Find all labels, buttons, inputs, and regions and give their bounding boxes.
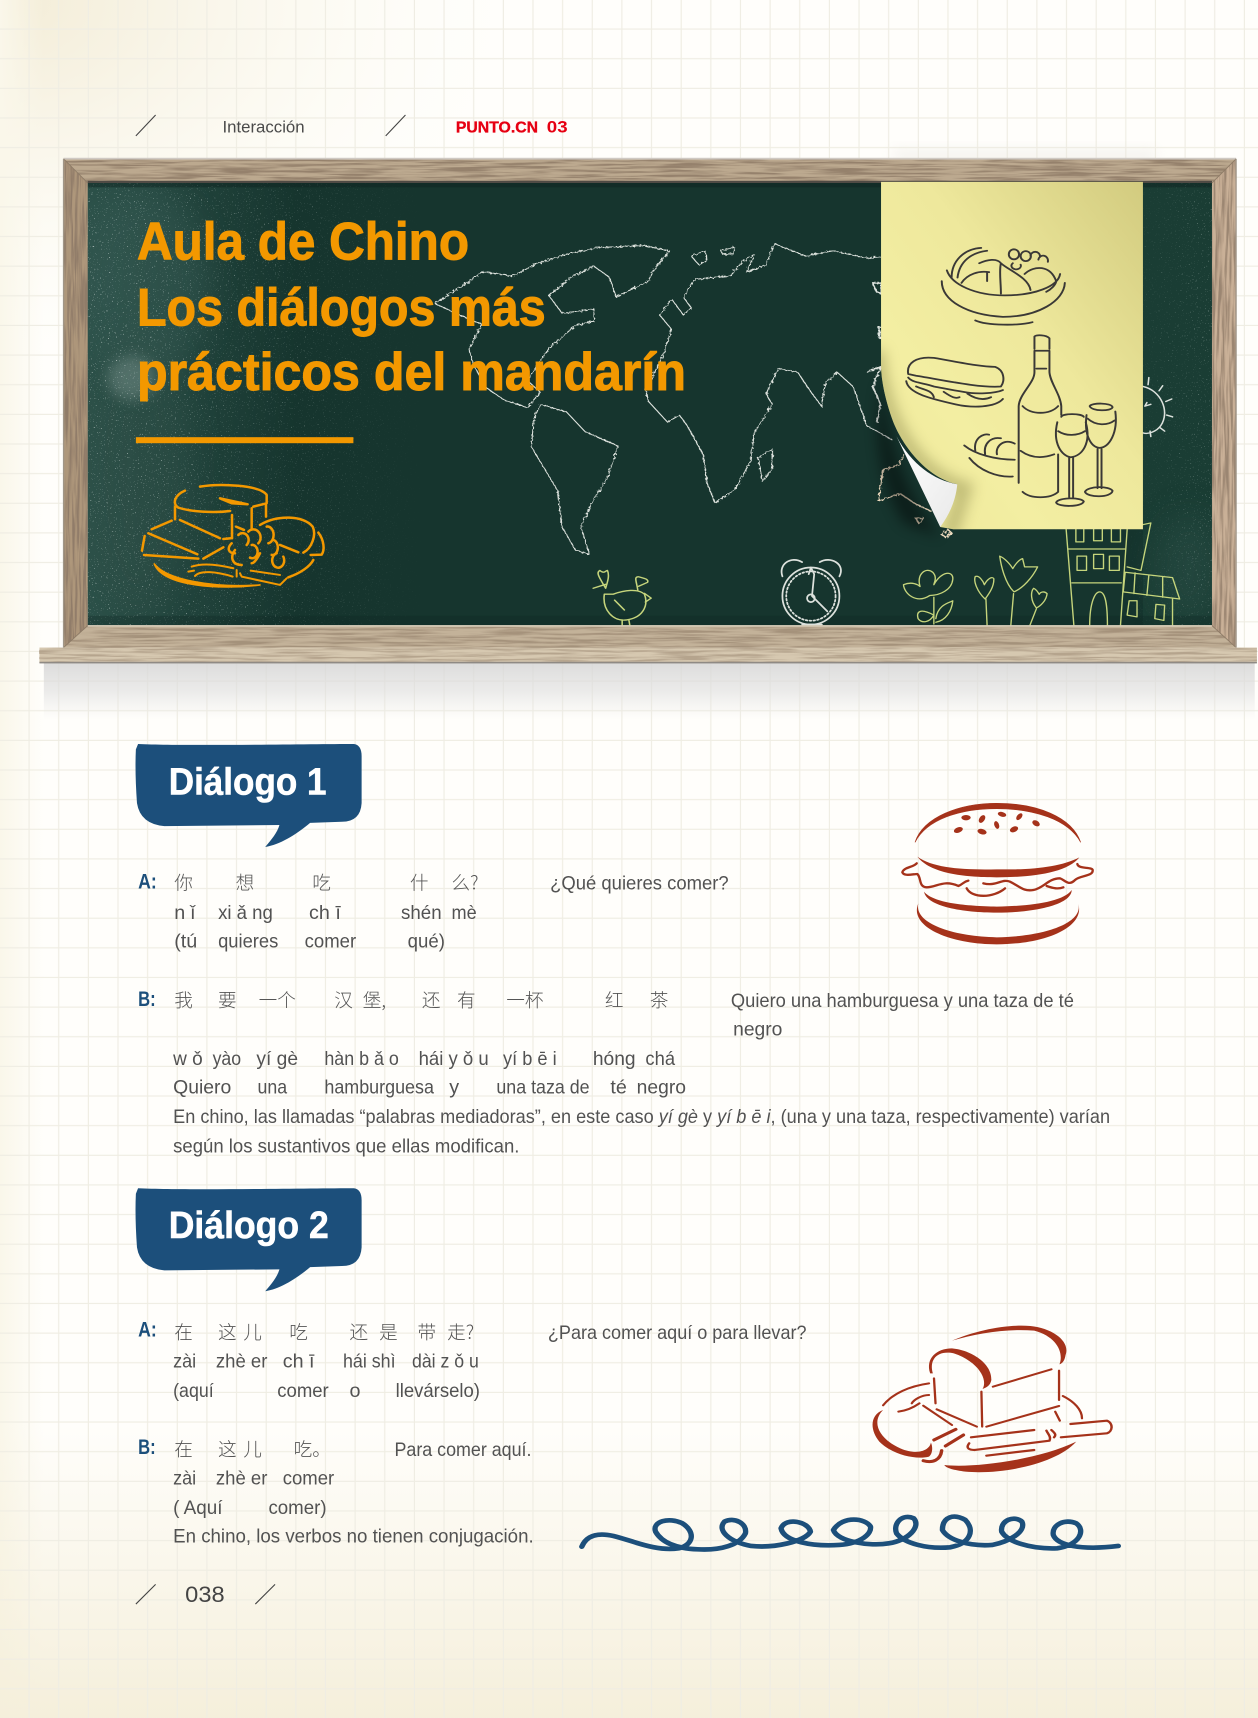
dialogue 2, speaker A: 带 (418, 1318, 436, 1345)
shadow beneath curled corner (877, 378, 940, 537)
dialogue 2, speaker A: o (350, 1380, 361, 1402)
dialogue 1, speaker A: (tú (174, 931, 197, 953)
dialogue 2, speaker B: 这 (218, 1435, 237, 1462)
title: Los diálogos más (137, 278, 546, 337)
dialogue 1, speaker B: 红 (605, 986, 624, 1013)
dialogue 1, speaker A: ¿Qué quieres comer? (550, 873, 729, 895)
icon: hamburger (902, 803, 1093, 944)
dialogue 1, speaker B (138, 986, 1074, 1098)
dialogue 2, speaker B: zhè er (216, 1468, 268, 1490)
dialogue 2, speaker B (138, 1435, 531, 1519)
shelf shadow (44, 663, 1255, 720)
dialogue 2, speaker A: 在 (174, 1318, 193, 1345)
speech bubble: Diálogo 2 (136, 1188, 362, 1291)
chalk tray shelf (39, 648, 1257, 663)
dialogue 2, speaker B: 吃。 (294, 1435, 331, 1462)
dialogue 2, speaker B: 儿 (243, 1435, 262, 1462)
dialogue 1, speaker A: ch ī (309, 902, 341, 924)
note on measure words: según los sustantivos que ellas modifican. (173, 1136, 519, 1158)
dialogue 1, speaker B: negro (733, 1018, 782, 1040)
decorative blue squiggle (582, 1517, 1118, 1550)
dialogue 2, speaker A (138, 1318, 807, 1402)
dialogue 2, speaker A: (aquí (173, 1380, 214, 1402)
dialogue 1, speaker B: 要 (218, 986, 237, 1013)
dialogue 1, speaker A: quieres (218, 931, 278, 953)
dialogue 2, speaker B: zài (173, 1468, 196, 1490)
dialogue 1, speaker B: hàn b ǎ o (324, 1048, 399, 1070)
icon: small bowl of pasta (964, 434, 1015, 477)
chalk bird (593, 570, 651, 625)
note on verbs: En chino, los verbos no tienen conjugación. (173, 1526, 534, 1548)
dialogue 2, speaker A: ¿Para comer aquí o para llevar? (548, 1322, 807, 1344)
folded corner (896, 436, 957, 527)
dialogue 1, speaker B: negro (637, 1076, 686, 1098)
icon: sandwich (906, 358, 1003, 407)
header: section label and magazine tag (136, 115, 568, 137)
speech bubble: Diálogo 2: Diálogo 2 (169, 1204, 329, 1247)
dialogue 2, speaker A: 走? (447, 1318, 474, 1345)
dialogue 2, speaker A: hái shì (343, 1350, 396, 1372)
dialogue 1, speaker B: chá (645, 1048, 675, 1070)
dialogue 2, speaker A: dài z ǒ u (412, 1350, 479, 1372)
dialogue 2, speaker B: 在 (174, 1435, 193, 1462)
chalk house (1066, 523, 1180, 626)
dialogue 1, speaker B: una (258, 1076, 287, 1098)
dialogue 1, speaker B: hái y ǒ u (419, 1048, 489, 1070)
dialogue 2, speaker A: 是 (379, 1318, 398, 1345)
wooden frame (64, 158, 1236, 648)
board surface (77, 182, 1222, 627)
title (137, 213, 686, 402)
title: Aula de Chino (137, 213, 469, 272)
dialogue 1, speaker B: yí gè (256, 1048, 298, 1070)
icon: wine bottle and two glasses (1019, 335, 1116, 506)
dialogue 1, speaker B: 汉 (334, 986, 353, 1013)
dialogue 1, speaker A: 么? (451, 869, 478, 896)
dialogue 1, speaker A: 你 (174, 869, 193, 896)
dialogue 1, speaker B: 一杯 (506, 986, 544, 1013)
header: section label and magazine tag: PUNTO.CN (456, 120, 538, 137)
icon: cheese board (142, 485, 324, 587)
speech bubble: Diálogo 1 (136, 744, 362, 847)
dialogue 1, speaker B: 有 (457, 986, 476, 1013)
dialogue 1, speaker A: 想 (236, 869, 254, 896)
dialogue 2, speaker A: zhè er (216, 1350, 268, 1372)
dialogue 1, speaker B: té (610, 1076, 627, 1098)
note on measure words (173, 1106, 1110, 1158)
dialogue 1, speaker A (138, 869, 729, 953)
page number: 038 (185, 1582, 225, 1607)
icon: fruit bowl (942, 248, 1065, 325)
dialogue 2, speaker A: 吃 (289, 1318, 308, 1345)
dialogue 2, speaker A: llevárselo) (396, 1380, 480, 1402)
header: section label and magazine tag: 03 (547, 119, 568, 137)
dialogue 1, speaker B: w ǒ (172, 1048, 203, 1070)
dialogue 2, speaker B: ( Aquí (173, 1497, 223, 1519)
dialogue 1, speaker A: shén (401, 902, 442, 924)
dialogue 1, speaker A: 什 (410, 869, 428, 896)
chalk sun (1143, 378, 1173, 436)
header: section label and magazine tag: Interacción (222, 118, 305, 137)
title: prácticos del mandarín (137, 343, 686, 402)
chalk world map (435, 244, 952, 554)
dialogue 2, speaker B: Para comer aquí. (394, 1439, 531, 1461)
dialogue 2, speaker A: 还 (350, 1318, 368, 1345)
dialogue 2, speaker B: comer) (268, 1497, 327, 1519)
dialogue 1, speaker B: hamburguesa (324, 1076, 434, 1098)
dialogue 2, speaker A: ch ī (283, 1350, 315, 1372)
dialogue 2, speaker B: B: (138, 1436, 156, 1459)
chalk flowers (903, 556, 1047, 626)
dialogue 1, speaker B: yí b ē i (503, 1048, 557, 1070)
dialogue 1, speaker A: A: (138, 871, 157, 894)
dialogue 1, speaker A: mè (451, 902, 477, 924)
dialogue 2, speaker A: 这 (218, 1318, 237, 1345)
dialogue 1, speaker B: 堡, (363, 986, 386, 1013)
dialogue 1, speaker A: n ǐ (174, 902, 197, 924)
speech bubble: Diálogo 1: Diálogo 1 (169, 760, 327, 803)
dialogue 2, speaker A: comer (277, 1380, 329, 1402)
page number (136, 1582, 275, 1607)
chalk alarm clock (782, 560, 841, 625)
dialogue 1, speaker B: hóng (593, 1048, 636, 1070)
dialogue 1, speaker A: comer (305, 931, 357, 953)
dialogue 2, speaker A: A: (138, 1319, 157, 1342)
chalkboard with wooden frame (39, 158, 1257, 663)
dialogue 1, speaker B: yào (213, 1048, 241, 1070)
note on measure words: En chino, las llamadas “palabras mediadoras”, en este caso yí gè y yí b ē i, (una y una taza, respectivamente) varían (173, 1106, 1110, 1128)
title underline (136, 437, 353, 443)
dialogue 1, speaker B: Quiero (173, 1076, 231, 1098)
dialogue 1, speaker B: Quiero una hamburguesa y una taza de té (731, 990, 1074, 1012)
soft shadow above the frame (893, 149, 1156, 162)
dialogue 2, speaker B: comer (283, 1468, 335, 1490)
dialogue 1, speaker B: una taza de (496, 1076, 590, 1098)
dialogue 1, speaker B: y (449, 1076, 459, 1098)
dialogue 1, speaker B: 一个 (259, 986, 296, 1013)
dialogue 1, speaker B: B: (138, 988, 156, 1011)
dialogue 1, speaker A: qué) (408, 931, 445, 953)
dialogue 1, speaker B: 我 (174, 986, 193, 1013)
icon: bread loaf on board (873, 1326, 1112, 1472)
dialogue 1, speaker A: 吃 (312, 869, 331, 896)
dialogue 1, speaker B: 茶 (650, 986, 668, 1013)
dialogue 1, speaker B: 还 (422, 986, 441, 1013)
sticky note (877, 182, 1143, 537)
dialogue 1, speaker A: xi ǎ ng (218, 902, 273, 924)
dialogue 2, speaker A: 儿 (243, 1318, 262, 1345)
dialogue 2, speaker A: zài (173, 1350, 196, 1372)
